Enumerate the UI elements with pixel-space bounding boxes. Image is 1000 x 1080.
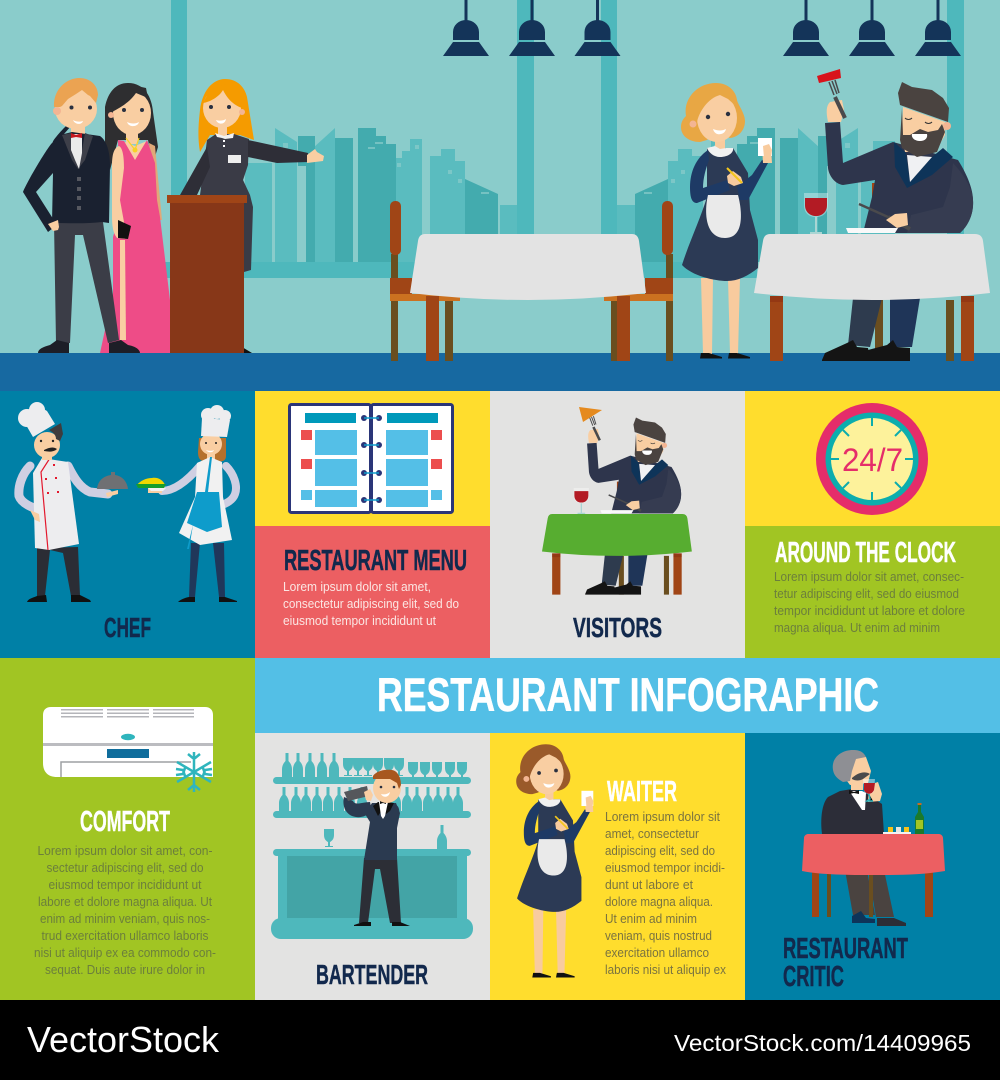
heading: waiter: WAITER xyxy=(607,776,677,808)
panel: 24/7 clock xyxy=(745,391,1000,526)
city skyline through windows xyxy=(164,0,964,278)
panel: visitors xyxy=(490,391,745,658)
heading: chef: CHEF xyxy=(104,612,151,643)
body text: veniam, quis nostrud xyxy=(605,929,712,943)
clock icon xyxy=(816,403,928,515)
panel: bartender xyxy=(255,733,490,1000)
body text: Lorem ipsum dolor sit amet, con- xyxy=(38,844,212,858)
waitress taking order xyxy=(681,83,772,358)
chef figure xyxy=(18,402,128,602)
waiter figure xyxy=(516,744,593,978)
floor xyxy=(0,353,1000,391)
steak on fork xyxy=(817,69,841,83)
dining visitor at green table xyxy=(542,416,692,595)
heading: visitors: VISITORS xyxy=(573,612,662,643)
hostess behind podium xyxy=(180,79,324,353)
panel: restaurant menu text xyxy=(255,526,490,658)
body text: amet, consectetur xyxy=(605,827,699,841)
body text: eiusmod tempor incididunt ut xyxy=(48,878,202,892)
panel: comfort xyxy=(0,658,255,1000)
bar shelves and counter xyxy=(271,753,473,939)
right chair xyxy=(604,201,673,361)
heading: comfort: COMFORT xyxy=(80,806,170,838)
couple: man in tuxedo xyxy=(23,78,140,353)
body text xyxy=(774,570,965,635)
heading: restaurant critic xyxy=(783,933,908,993)
body text: laboris nisi ut aliquip ex xyxy=(605,963,727,977)
body text xyxy=(283,580,459,628)
body text: Lorem ipsum dolor sit amet, xyxy=(283,580,431,594)
brand name: VectorStock xyxy=(27,1019,220,1060)
bartender figure xyxy=(343,770,410,926)
critic figure xyxy=(821,750,911,926)
panel: around the clock text xyxy=(745,526,1000,658)
female cook figure xyxy=(136,405,237,602)
couple: woman in pink dress xyxy=(100,83,182,353)
panel: restaurant critic xyxy=(745,733,1000,1000)
heading: bartender: BARTENDER xyxy=(316,959,428,990)
restaurant scene panel xyxy=(0,0,1000,391)
heading: restaurant menu: RESTAURANT MENU xyxy=(284,545,467,577)
pizza slice on fork xyxy=(579,407,602,422)
body text: Lorem ipsum dolor sit xyxy=(605,810,720,824)
body text: eiusmod tempor incidi- xyxy=(605,861,725,875)
heading: restaurant critic: RESTAURANT xyxy=(783,933,908,965)
ceiling lamps xyxy=(443,0,961,56)
heading: restaurant critic: CRITIC xyxy=(783,961,844,993)
title banner xyxy=(255,658,1000,733)
body text: enim ad minim veniam, quis nos- xyxy=(40,912,210,926)
body text: adipiscing elit, sed do xyxy=(605,844,715,858)
empty table xyxy=(410,234,646,361)
table with wine bottle xyxy=(802,803,945,917)
panel: chef xyxy=(0,391,255,658)
left chair xyxy=(390,201,460,361)
body text: sectetur adipiscing elit, sed do xyxy=(46,861,204,875)
footer watermark bar xyxy=(0,1000,1000,1080)
body text: eiusmod tempor incididunt ut xyxy=(283,614,437,628)
open menu book xyxy=(290,404,452,512)
panel: waiter xyxy=(490,733,745,1000)
body text: tetur adipiscing elit, sed do eiusmod xyxy=(774,587,959,601)
snowflake icon xyxy=(176,752,212,792)
body text xyxy=(34,844,216,977)
body text: dolore magna aliqua. xyxy=(605,895,713,909)
air conditioner icon xyxy=(43,707,213,777)
image url: VectorStock.com/14409965 xyxy=(674,1030,971,1056)
podium xyxy=(167,195,247,353)
clock icon: 24/7 xyxy=(842,442,903,478)
bearded man dining at table xyxy=(754,69,990,361)
body text xyxy=(605,810,727,977)
body text: Lorem ipsum dolor sit amet, consec- xyxy=(774,570,964,584)
body text: Ut enim ad minim xyxy=(605,912,697,926)
body text: tempor incididunt ut labore et dolore xyxy=(774,604,965,618)
body text: magna aliqua. Ut enim ad minim xyxy=(774,621,940,635)
body text: nisi ut aliquip ex ea commodo con- xyxy=(34,946,216,960)
body text: labore et dolore magna aliqua. Ut xyxy=(38,895,212,909)
body text: trud exercitation ullamco laboris xyxy=(42,929,208,943)
panel: restaurant menu icon xyxy=(255,391,490,526)
body text: sequat. Duis aute irure dolor in xyxy=(45,963,205,977)
body text: consectetur adipiscing elit, sed do xyxy=(283,597,459,611)
body text: dunt ut labore et xyxy=(605,878,693,892)
body text: exercitation ullamco xyxy=(605,946,709,960)
